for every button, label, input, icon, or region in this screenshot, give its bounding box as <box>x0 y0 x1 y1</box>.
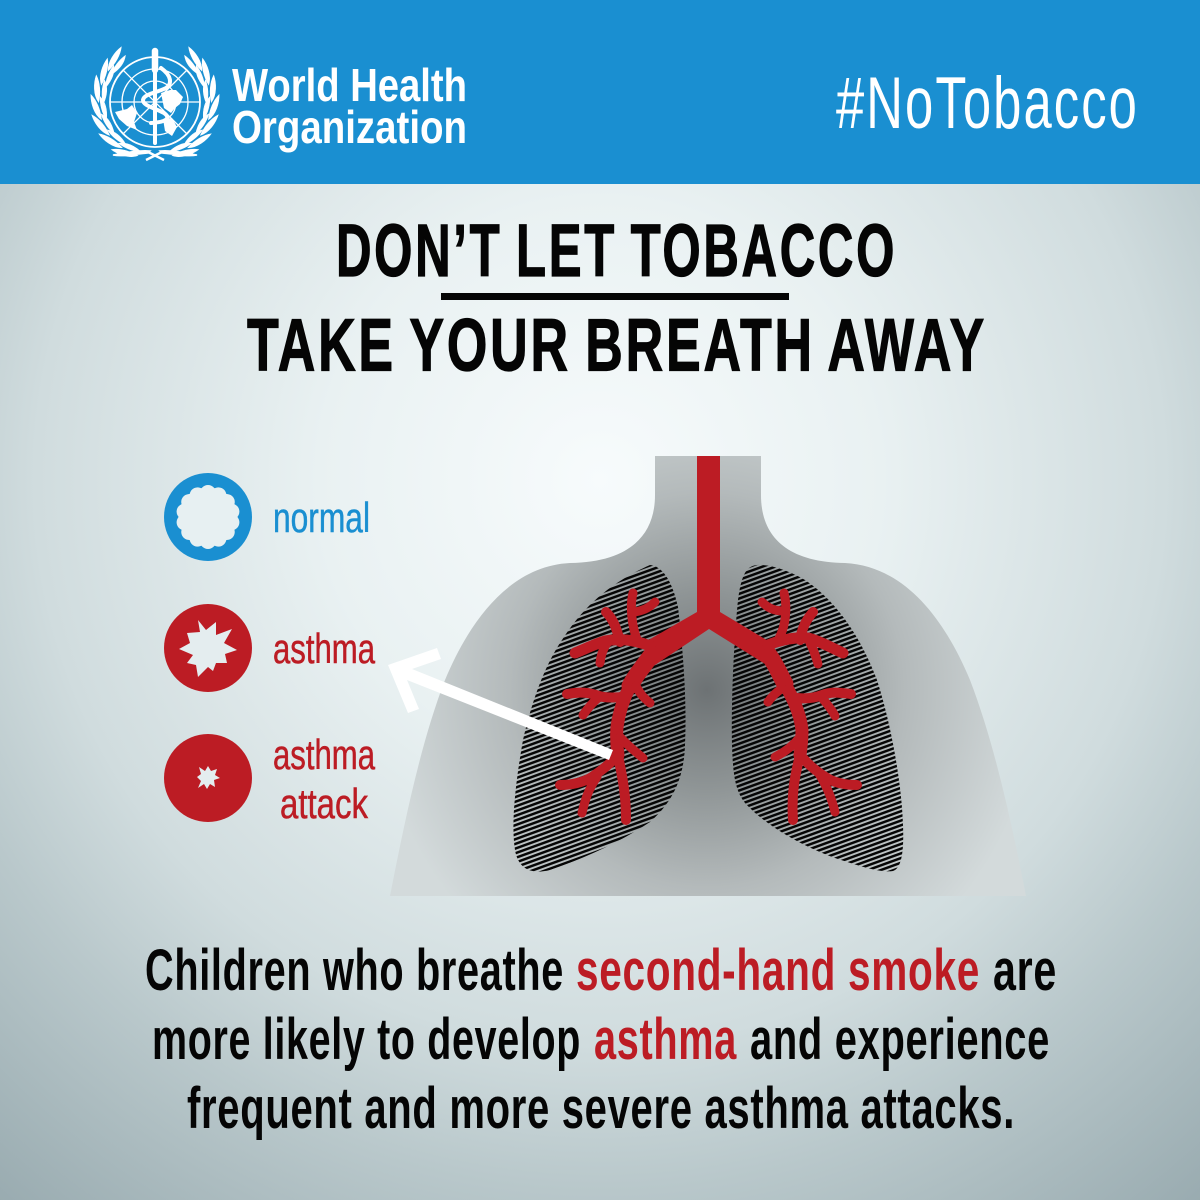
text line 1: Children who breathe <box>145 938 564 1003</box>
continents <box>115 90 183 136</box>
left bronchial tree <box>560 593 655 820</box>
text line 1 <box>145 938 1057 1003</box>
label: asthma: asthma <box>273 625 375 672</box>
left lung <box>513 565 686 872</box>
icon: asthma airway <box>164 604 252 692</box>
label: normal: normal <box>273 494 370 541</box>
text line 1: are <box>993 938 1057 1003</box>
text line 2: and experience <box>750 1007 1050 1072</box>
header band <box>0 0 1200 184</box>
WHO logo emblem <box>91 47 219 163</box>
wreath ribbon <box>146 152 164 160</box>
organisation name <box>232 59 467 153</box>
torso silhouette <box>390 456 1026 896</box>
text line 1: second-hand smoke <box>576 938 980 1003</box>
title <box>247 209 987 386</box>
text line 2: asthma <box>594 1007 737 1072</box>
right lung <box>732 565 903 871</box>
label: asthma attack: asthma <box>273 731 375 778</box>
text line 2: more likely to develop <box>152 1007 581 1072</box>
icon: asthma attack airway <box>164 734 252 822</box>
icon: normal airway <box>164 473 252 561</box>
legend: airway states <box>164 473 375 827</box>
laurel wreath right <box>160 47 219 163</box>
organisation name: World Health <box>232 59 467 111</box>
label: asthma attack: attack <box>280 780 369 827</box>
arrow from lung to asthma label <box>388 648 613 760</box>
organisation name: Organization <box>232 101 467 153</box>
trachea and main bronchi <box>645 456 775 665</box>
label: asthma attack <box>273 731 375 827</box>
title: DON’T LET TOBACCO <box>336 209 897 292</box>
right bronchial tree <box>762 593 857 820</box>
laurel wreath left <box>91 47 150 163</box>
lungs illustration <box>390 456 1026 896</box>
body text <box>145 938 1057 1141</box>
